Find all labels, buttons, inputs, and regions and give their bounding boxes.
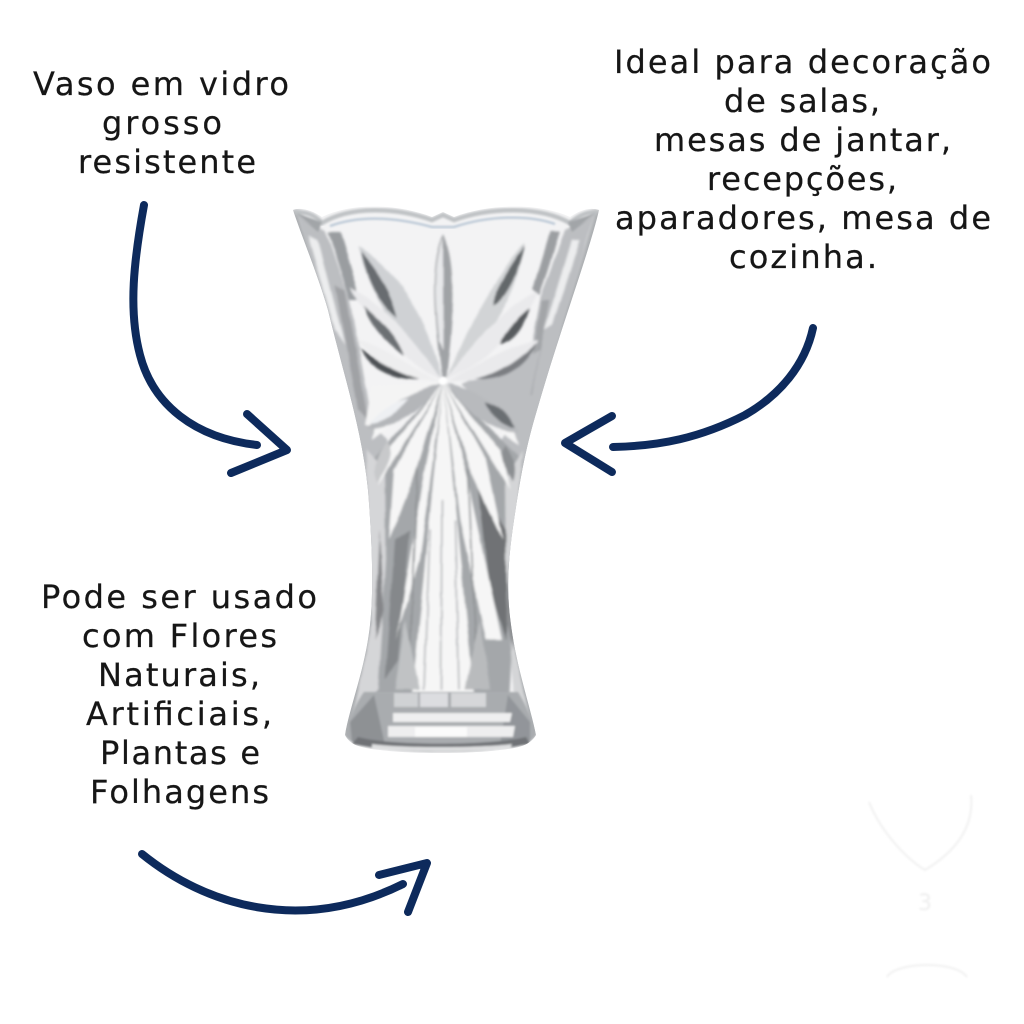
image: crystal glass vase bbox=[290, 200, 602, 760]
vase body bbox=[290, 200, 602, 760]
star centre bbox=[439, 377, 447, 385]
arrow: bottom pointing to vase bbox=[142, 854, 427, 912]
text: vaso em vidro grosso: resistente bbox=[78, 143, 256, 181]
text: ideal para decoração: mesas de jantar, bbox=[654, 121, 951, 159]
outer edge shading bbox=[293, 210, 599, 735]
text: pode ser usado: Folhagens bbox=[90, 773, 269, 811]
thin grooves bbox=[408, 470, 478, 690]
arrow: top left pointing to vase bbox=[133, 205, 287, 473]
text: ideal para decoração: aparadores, mesa de bbox=[615, 199, 991, 237]
watermark: faint heart outline and number bbox=[869, 795, 971, 977]
text: ideal para decoração: Ideal para decoração bbox=[614, 43, 991, 81]
star leaves bbox=[434, 233, 452, 378]
rays from star bbox=[372, 382, 518, 695]
text: pode ser usado: Plantas e bbox=[100, 734, 260, 772]
text: vaso em vidro grosso: Vaso em vidro bbox=[33, 65, 289, 103]
lower leaves bbox=[368, 384, 441, 428]
side band left bbox=[300, 218, 388, 470]
text: ideal para decoração: recepções, bbox=[707, 160, 897, 198]
text: pode ser usado: Artificiais, bbox=[86, 695, 272, 733]
text: pode ser usado: Pode ser usado bbox=[41, 578, 317, 616]
text: ideal para decoração: cozinha. bbox=[729, 238, 877, 276]
text: pode ser usado: com Flores bbox=[82, 617, 277, 655]
text: pode ser usado bbox=[41, 578, 317, 811]
text: pode ser usado: Naturais, bbox=[98, 656, 260, 694]
text: vaso em vidro grosso bbox=[33, 65, 289, 181]
text: ideal para decoração bbox=[614, 43, 991, 276]
lower fan grey background bbox=[372, 382, 522, 695]
arrow: top right pointing to vase bbox=[565, 328, 813, 472]
base bbox=[345, 692, 536, 752]
text: ideal para decoração: de salas, bbox=[724, 82, 880, 120]
side band right bbox=[501, 217, 592, 468]
watermark: faint heart outline and number: 3 bbox=[918, 891, 932, 916]
lower side light bands bbox=[356, 450, 388, 704]
rim bbox=[295, 210, 597, 223]
text: vaso em vidro grosso: grosso bbox=[102, 104, 222, 142]
dark wedges bbox=[478, 480, 506, 640]
